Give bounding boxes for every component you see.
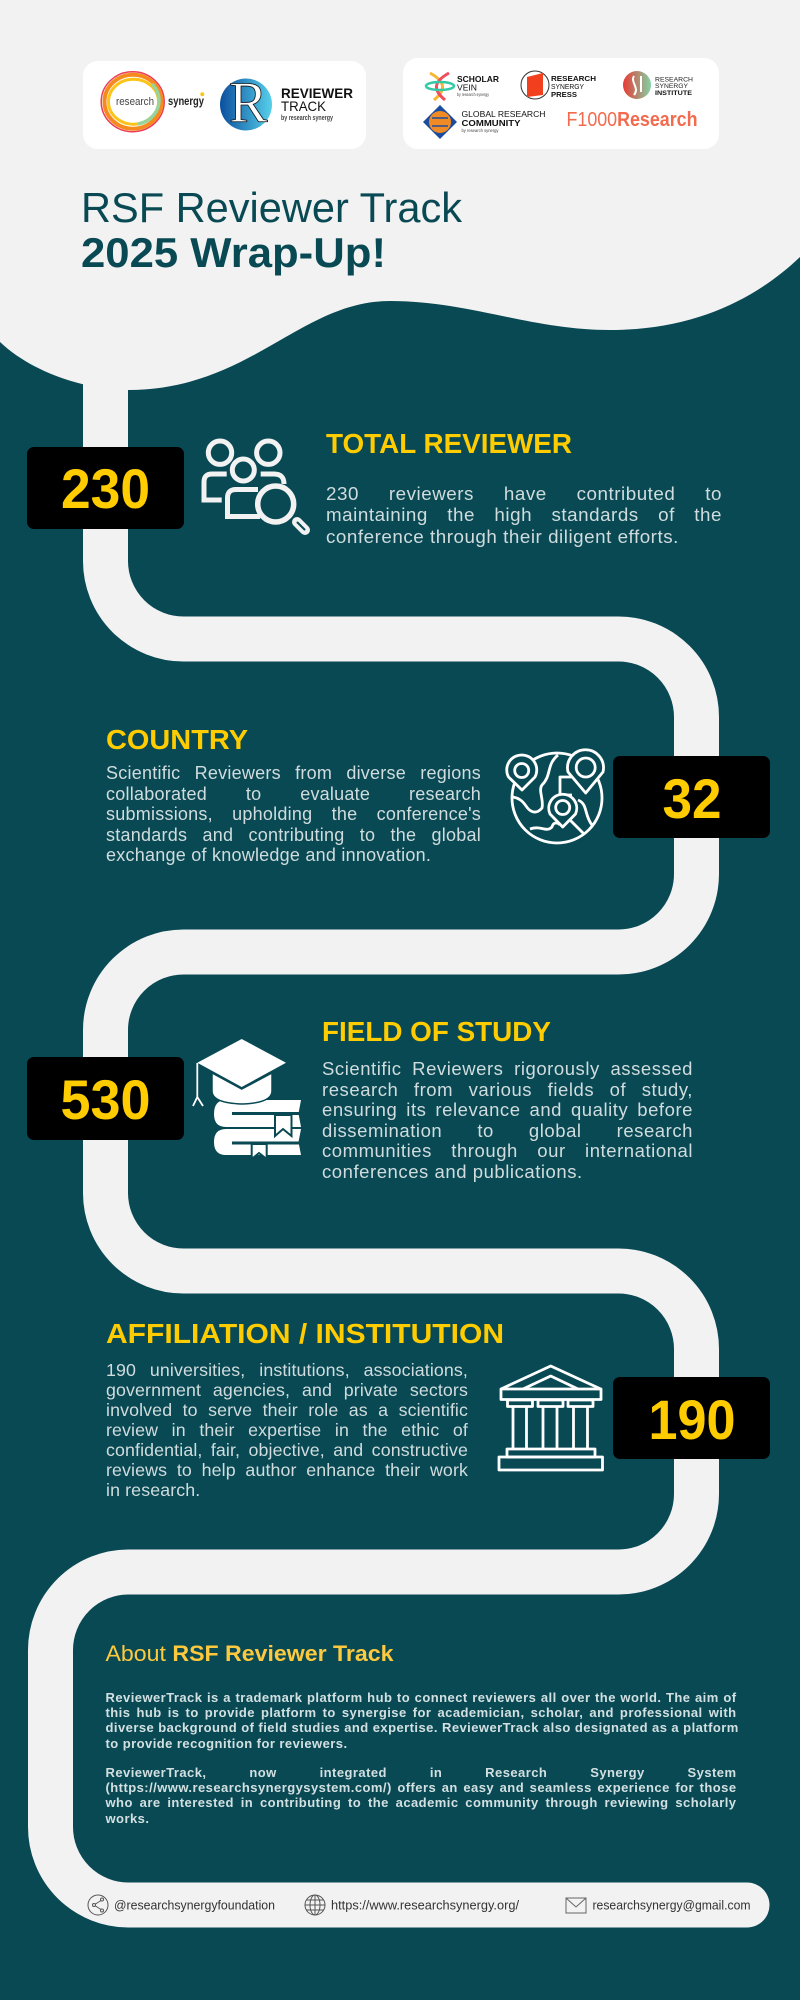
text: country description	[106, 763, 481, 865]
stat badge: 190	[613, 1377, 770, 1459]
text: affiliation description: involved to serve their role as a scientific	[106, 1400, 468, 1420]
header wave background	[0, 0, 800, 390]
icon: graduation cap on books	[193, 1039, 301, 1159]
logo: reviewer track	[220, 70, 353, 135]
text: affiliation description: 190 universities, institutions, associations,	[106, 1360, 468, 1380]
panel: partner logos right	[403, 58, 719, 149]
text: about paragraph two: who are interested in contributing to the academic community through reviewing scholarly	[106, 1795, 736, 1810]
logo: research synergy institute: RESEARCH	[655, 76, 693, 84]
text: about paragraph one: this hub is to provide platform to synergise for academician, scholar, and professional with	[106, 1705, 736, 1720]
heading: total reviewer: TOTAL REVIEWER	[326, 428, 572, 459]
text: about paragraph one	[106, 1690, 739, 1751]
logo: research synergy institute: INSTITUTE	[655, 90, 693, 97]
text: about paragraph two: ReviewerTrack, now integrated in Research Synergy System	[106, 1765, 736, 1780]
logo: research synergy	[101, 72, 204, 132]
logo: research synergy press: PRESS	[551, 90, 577, 99]
text: field of study description	[322, 1058, 693, 1182]
logo: F1000Research: F1000Research	[566, 109, 698, 131]
text: social handle: @researchsynergyfoundation	[114, 1898, 275, 1912]
text: total reviewer description: conference through their diligent efforts.	[326, 526, 679, 547]
text: total reviewer description: maintaining the high standards of the	[326, 504, 722, 525]
icon: globe with pins	[507, 750, 604, 843]
logo: research synergy institute	[623, 71, 693, 99]
logo: reviewer track: TRACK	[281, 98, 327, 114]
logo: scholar vein: VEIN	[457, 82, 477, 92]
text: affiliation description	[106, 1360, 468, 1500]
text: field of study description: dissemination to global research	[322, 1120, 693, 1141]
text: affiliation description: in research.	[106, 1480, 200, 1500]
text: about paragraph two: works.	[106, 1811, 149, 1826]
stat badge: 230	[27, 447, 184, 529]
heading: about: About RSF Reviewer Track	[106, 1641, 394, 1666]
stat badge: 32: 32	[662, 767, 722, 830]
text: about paragraph one: diverse background of field studies and expertise. ReviewerTrack also designated as a platform	[106, 1720, 739, 1735]
logo: research synergy institute: SYNERGY	[655, 83, 689, 90]
logo: research synergy press	[521, 71, 596, 99]
text: affiliation description: confidential, fair, objective, and constructive	[106, 1440, 468, 1460]
logo: global research community: by research synergy	[462, 128, 499, 133]
text: field of study description: conferences and publications.	[322, 1161, 583, 1182]
stat badge: 530	[27, 1057, 184, 1140]
text: about paragraph one: to provide recognition for reviewers.	[106, 1736, 348, 1751]
logo: research synergy press: SYNERGY	[551, 82, 584, 91]
text: country description: exchange of knowledge and innovation.	[106, 845, 431, 865]
logo: scholar vein: SCHOLAR	[457, 74, 499, 84]
text: country description: Scientific Reviewers from diverse regions	[106, 763, 481, 783]
winding road path	[50, 375, 747, 1905]
text: affiliation description: review in their expertise in the ethic of	[106, 1420, 468, 1440]
logo: reviewer track: by research synergy	[281, 115, 333, 122]
panel: partner logos left	[83, 61, 366, 149]
text: field of study description: communities through our international	[322, 1140, 693, 1161]
text: affiliation description: reviews to help author enhance their work	[106, 1460, 468, 1480]
logo: global research community: GLOBAL RESEARCH	[462, 109, 546, 119]
logo: research synergy: research	[116, 96, 154, 108]
icon: reviewers with magnifier	[204, 441, 305, 530]
text: about paragraph one: ReviewerTrack is a trademark platform hub to connect reviewers all over the world. The aim of	[106, 1690, 736, 1705]
title	[81, 184, 463, 276]
icon: share	[88, 1895, 108, 1915]
title: RSF Reviewer Track	[81, 184, 463, 231]
text: field of study description: ensuring its relevance and quality before	[322, 1099, 693, 1120]
stat badge: 230: 230	[61, 457, 150, 520]
text: total reviewer description	[326, 483, 722, 547]
stat badge: 32	[613, 756, 770, 838]
text: email: researchsynergy@gmail.com	[592, 1898, 750, 1912]
footer contact row	[88, 1895, 750, 1915]
icon: mail	[566, 1898, 586, 1913]
text: field of study description: Scientific Reviewers rigorously assessed	[322, 1058, 693, 1079]
heading: country: COUNTRY	[106, 724, 248, 755]
icon: globe	[305, 1895, 325, 1915]
logo: research synergy press: RESEARCH	[551, 74, 596, 83]
logo: research synergy: synergy	[168, 96, 204, 108]
text: about paragraph two	[106, 1765, 736, 1826]
title: 2025 Wrap-Up!	[81, 229, 386, 276]
text: affiliation description: government agencies, and private sectors	[106, 1380, 468, 1400]
heading: affiliation: AFFILIATION / INSTITUTION	[106, 1318, 504, 1349]
logo: reviewer track: R	[229, 70, 268, 135]
logo: scholar vein: by research synergy	[457, 92, 490, 97]
text: country description: standards and contributing to the global	[106, 825, 481, 845]
logo: scholar vein	[426, 73, 499, 100]
text: country description: collaborated to evaluate research	[106, 784, 481, 804]
logo: reviewer track: REVIEWER	[281, 85, 353, 101]
icon: institution building	[499, 1366, 602, 1470]
logo: global research community	[423, 105, 546, 139]
stat badge: 190: 190	[648, 1388, 736, 1451]
text: about paragraph two: (https://www.researchsynergysystem.com/) offers an easy and seamless experience for those	[106, 1780, 736, 1795]
stat badge: 530: 530	[60, 1068, 150, 1131]
text: field of study description: research from various fields of study,	[322, 1079, 693, 1100]
text: website: https://www.researchsynergy.org/	[331, 1898, 519, 1912]
logo: global research community: COMMUNITY	[462, 118, 521, 128]
text: country description: submissions, upholding the conference's	[106, 804, 481, 824]
text: total reviewer description: 230 reviewers have contributed to	[326, 483, 722, 504]
heading: field of study: FIELD OF STUDY	[322, 1016, 551, 1047]
